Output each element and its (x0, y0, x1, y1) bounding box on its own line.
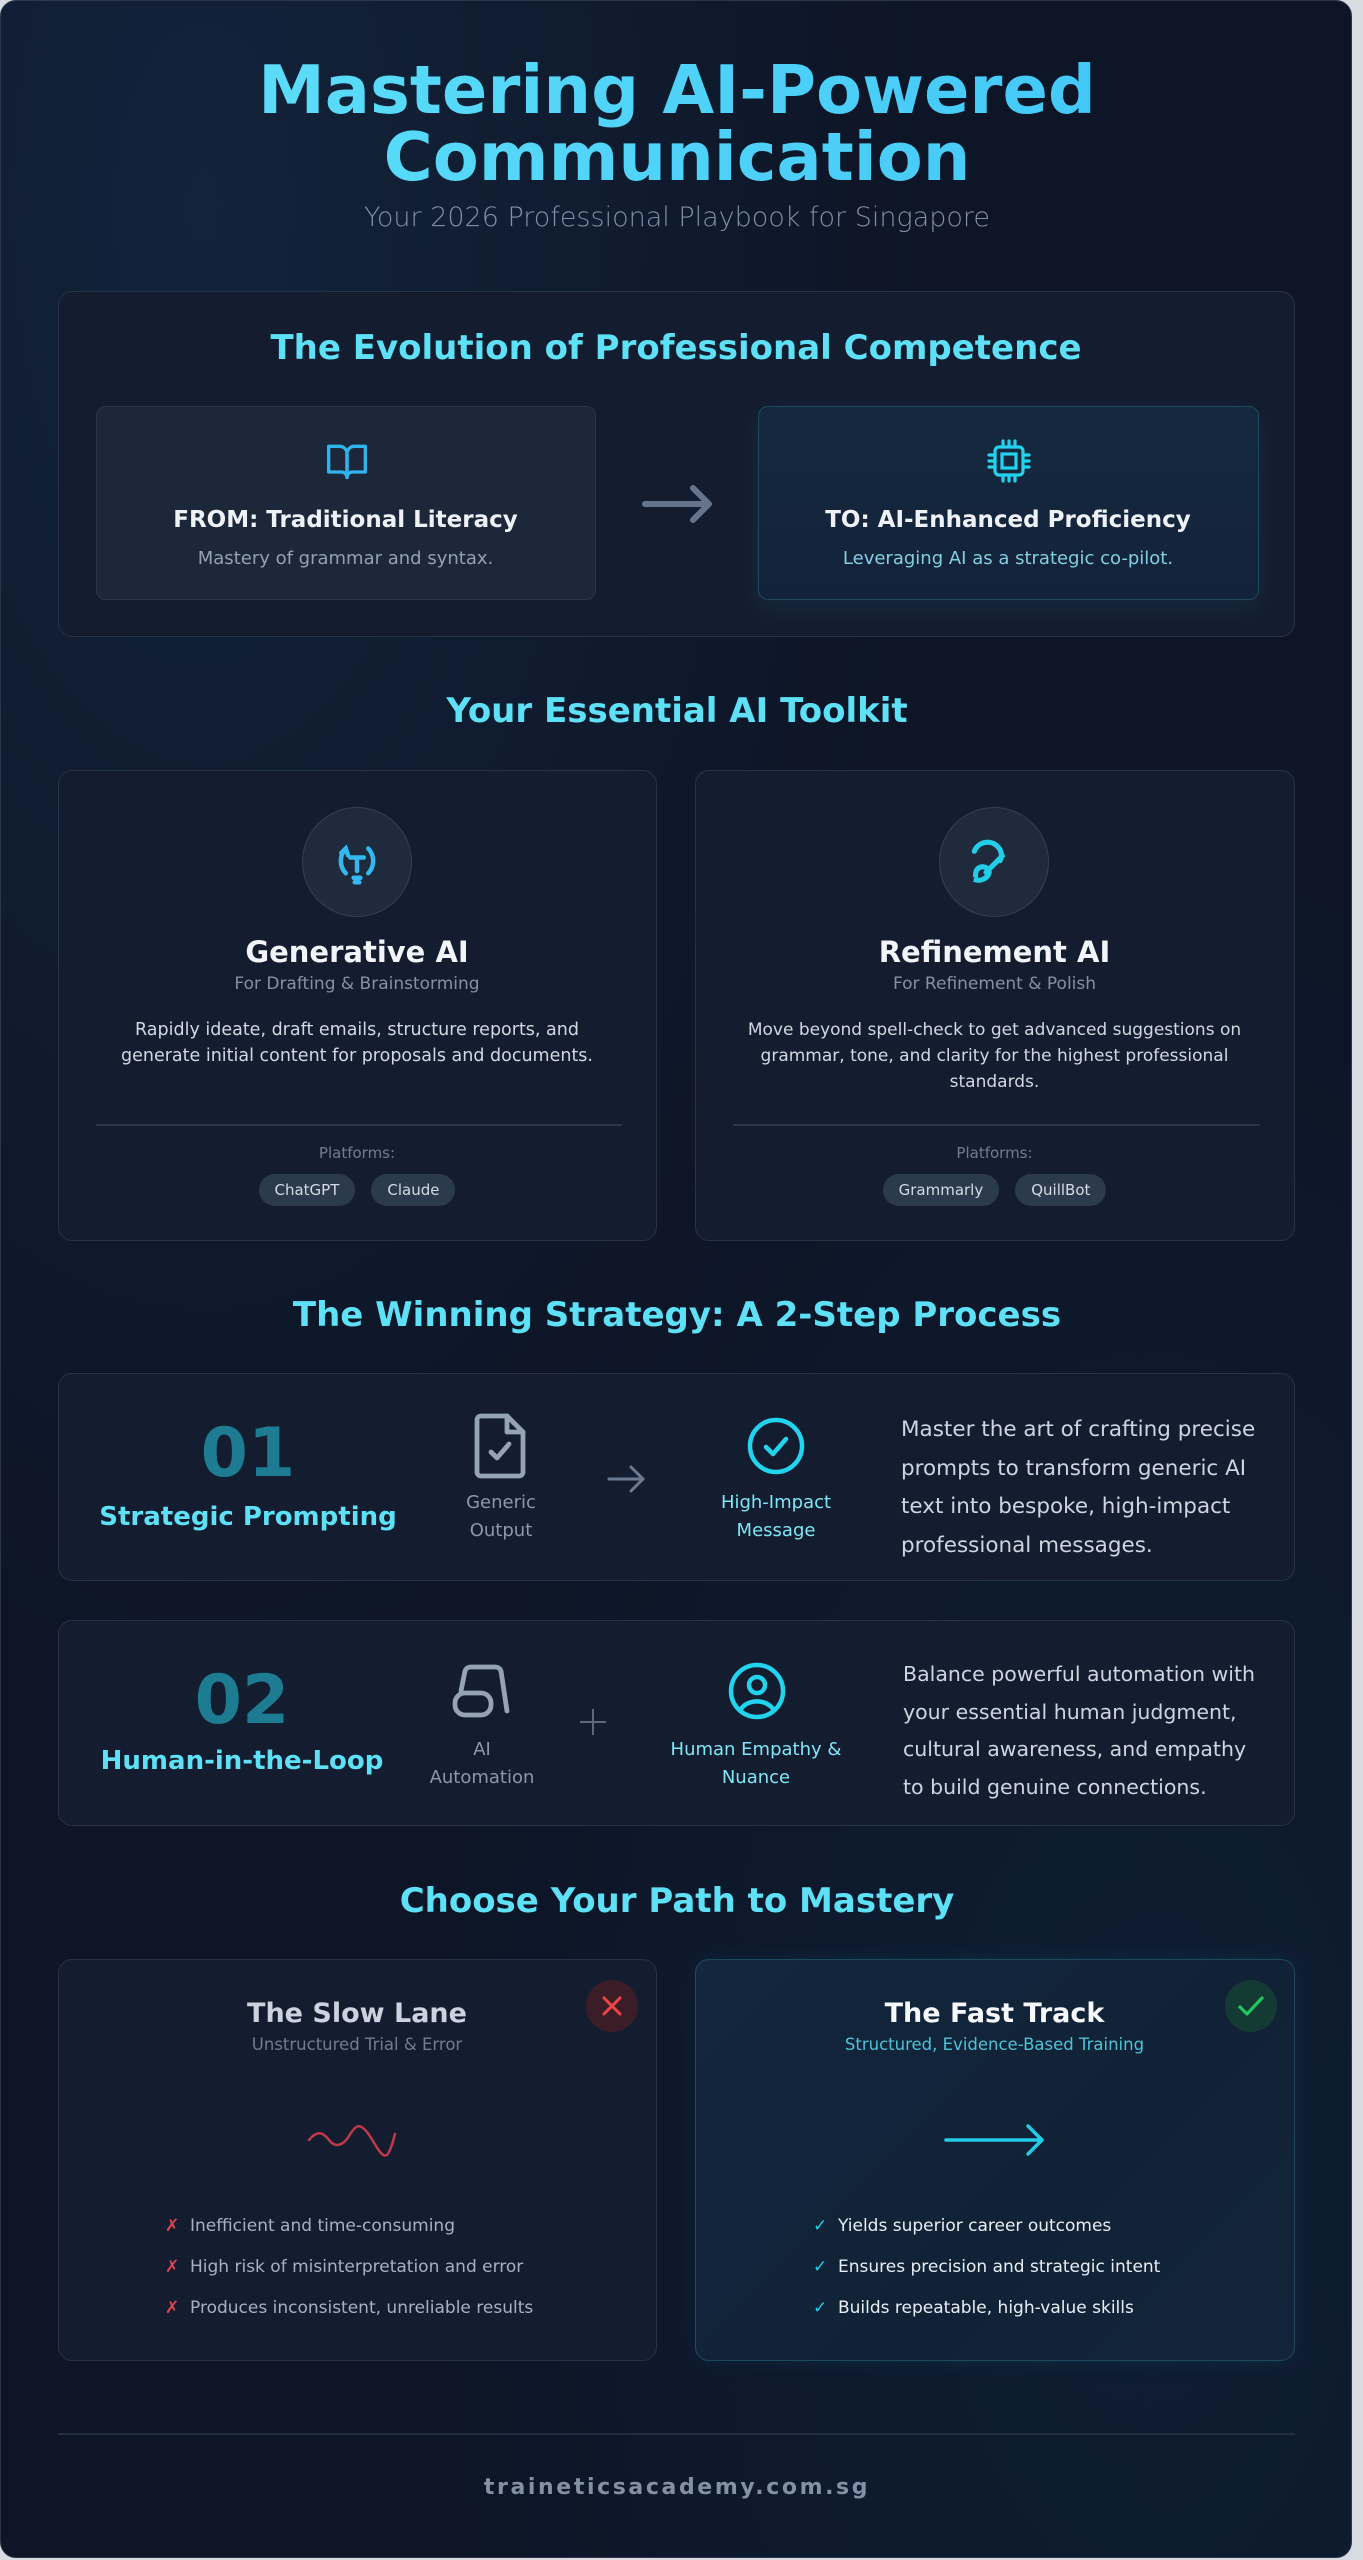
desc: generative: Rapidly ideate, draft emails, structure reports, and generate initial content for proposals and documents. (121, 1020, 593, 1066)
title: generative: Generative AI (245, 935, 469, 969)
panel: refinement AI (695, 770, 1295, 1241)
list: slow lane: ✗ (165, 2216, 179, 2236)
heading: strategy: The Winning Strategy: A 2-Step Process (293, 1295, 1061, 1335)
icon: generative (302, 807, 412, 917)
text: to: TO: AI-Enhanced Proficiency (825, 507, 1191, 533)
subtitle: slow lane: Unstructured Trial & Error (252, 2035, 462, 2054)
list: fast track: Builds repeatable, high-value skills (838, 2298, 1134, 2318)
subtitle: refinement: For Refinement & Polish (893, 974, 1096, 994)
subtitle: generative: For Drafting & Brainstorming (234, 974, 480, 994)
label: generic output: Output (470, 1520, 532, 1541)
icon: book (327, 444, 367, 480)
label: generic output: Generic (466, 1492, 536, 1513)
number: 02: 02 (195, 1661, 289, 1740)
title: human-in-the-loop: Human-in-the-Loop (101, 1746, 383, 1776)
platforms: refinement: Platforms: (956, 1144, 1033, 1162)
list: fast track: Yields superior career outcomes (838, 2216, 1111, 2236)
heading: toolkit: Your Essential AI Toolkit (446, 691, 908, 731)
label: human empathy: Human Empathy & (671, 1739, 841, 1760)
title: fast track: The Fast Track (885, 1998, 1104, 2029)
pills: generative: Claude (387, 1181, 439, 1199)
list: fast track: Ensures precision and strategic intent (838, 2257, 1160, 2277)
list: fast track: ✓ (813, 2298, 827, 2318)
footer: traineticsacademy.com.sg (484, 2475, 870, 2500)
arrow (642, 485, 712, 523)
title: Communication (384, 118, 970, 196)
label: human empathy: Nuance (722, 1767, 790, 1788)
pills: refinement: QuillBot (1031, 1181, 1090, 1199)
icon: plus (580, 1709, 606, 1735)
label: generic output (466, 1492, 536, 1541)
list: fast track (813, 2216, 1160, 2318)
heading: evolution: The Evolution of Professional Competence (270, 328, 1082, 368)
desc: step 1: Master the art of crafting precise prompts to transform generic AI text into bespoke, high-impact professional messages. (901, 1417, 1255, 1558)
icon: straight arrow (944, 2124, 1044, 2156)
icon: squiggle (308, 2125, 396, 2157)
heading: path: Choose Your Path to Mastery (400, 1881, 954, 1921)
icon: refinement (939, 807, 1049, 917)
label: high-impact message: High-Impact (721, 1492, 831, 1513)
list: slow lane: High risk of misinterpretation and error (190, 2257, 523, 2277)
label: high-impact message: Message (737, 1520, 815, 1541)
pills: refinement (883, 1174, 1106, 1206)
icon: chip (987, 439, 1031, 483)
panel: fast track (695, 1959, 1295, 2361)
list: slow lane: Inefficient and time-consuming (190, 2216, 455, 2236)
icon: person (728, 1662, 786, 1720)
label: human empathy (671, 1739, 841, 1788)
box: from (96, 406, 596, 600)
title: refinement: Refinement AI (879, 935, 1110, 969)
title: strategic prompting: Strategic Prompting (99, 1502, 397, 1532)
icon: AI automation (452, 1664, 510, 1718)
list: slow lane: Produces inconsistent, unreliable results (190, 2298, 533, 2318)
panel: evolution (58, 291, 1295, 637)
pills: generative (259, 1174, 455, 1206)
badge: check (1225, 1980, 1277, 2032)
list: slow lane: ✗ (165, 2298, 179, 2318)
text: to desc: Leveraging AI as a strategic co-pilot. (843, 548, 1173, 569)
pills: generative: ChatGPT (274, 1181, 339, 1199)
pills: refinement: Grammarly (899, 1181, 983, 1199)
label: high-impact message (721, 1492, 831, 1541)
desc: refinement: Move beyond spell-check to get advanced suggestions on grammar, tone, and clarity for the highest professional standards. (748, 1020, 1241, 1092)
subtitle: fast track: Structured, Evidence-Based Training (845, 2035, 1144, 2054)
desc: step 2: Balance powerful automation with your essential human judgment, cultural awareness, and empathy to build genuine connections. (903, 1662, 1255, 1798)
list: slow lane (165, 2216, 533, 2318)
panel: generative AI (58, 770, 657, 1241)
label: AI automation: AI (473, 1739, 491, 1760)
icon: check circle (748, 1418, 804, 1474)
text: from: FROM: Traditional Literacy (173, 507, 518, 533)
list: slow lane: ✗ (165, 2257, 179, 2277)
label: AI automation: Automation (430, 1767, 534, 1788)
title: Mastering AI-Powered (258, 51, 1096, 129)
title (1, 57, 1353, 191)
list: fast track: ✓ (813, 2216, 827, 2236)
title: slow lane: The Slow Lane (247, 1998, 467, 2029)
subtitle: Your 2026 Professional Playbook for Singapore (364, 202, 990, 233)
badge: x (586, 1980, 638, 2032)
panel: step 1 (58, 1373, 1295, 1581)
box: to (758, 406, 1259, 600)
text: from desc: Mastery of grammar and syntax. (198, 548, 493, 569)
label: AI automation (430, 1739, 534, 1788)
arrow: step 1 (608, 1465, 645, 1492)
icon: document (474, 1414, 526, 1478)
number: 01: 01 (201, 1414, 295, 1493)
panel: step 2 (58, 1620, 1295, 1826)
platforms: generative: Platforms: (319, 1144, 395, 1162)
list: fast track: ✓ (813, 2257, 827, 2277)
panel: slow lane (58, 1959, 657, 2361)
